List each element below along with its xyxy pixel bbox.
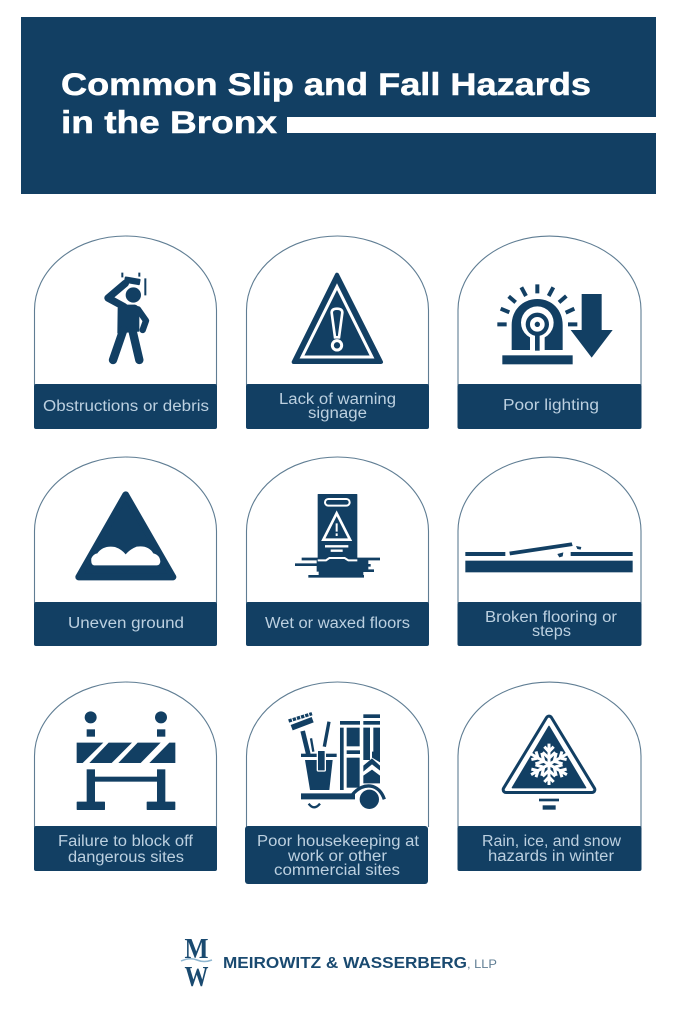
label: warning signage: Lack of warning [279,391,396,408]
title: in the Bronx [61,104,278,140]
title: Common Slip and Fall Hazards [61,66,591,102]
panel: rain, ice and snow hazards [458,682,642,871]
icon: siren with down arrow [497,284,613,364]
icon: wet floor sign in puddle [295,494,380,578]
logo wordmark: MEIROWITZ & WASSERBERG [223,955,467,972]
icon: road barricade [77,711,175,810]
label: uneven ground: Uneven ground [68,615,184,632]
icon: cleaning cart [289,714,384,809]
logo mark: W [184,962,208,993]
icon: warning triangle [294,275,381,362]
label: rain ice snow: Rain, ice, and snow [482,833,622,850]
panel: obstructions or debris [34,236,217,429]
panel: wet or waxed floors [246,457,429,646]
label: poor lighting: Poor lighting [503,397,599,414]
label: poor housekeeping: Poor housekeeping at [257,833,420,850]
panel: uneven ground [34,457,217,646]
panel: broken flooring or steps [458,457,642,646]
panel: poor housekeeping [245,682,428,884]
icon: bump road sign [79,495,173,577]
label: broken flooring: Broken flooring or [485,609,617,626]
label: wet floors: Wet or waxed floors [265,615,410,632]
logo mark: M [184,934,208,965]
label: rain ice snow: hazards in winter [488,848,614,865]
title accent bar [287,117,656,133]
icon: person hit by falling object [108,273,146,360]
label: warning signage: signage [308,405,367,422]
label: obstructions: Obstructions or debris [43,398,209,415]
label: poor housekeeping: work or other [287,848,387,865]
panel: lack of warning signage [246,236,429,429]
header banner [21,17,656,194]
icon: broken floorboards [465,542,633,572]
panel: failure to block off dangerous sites [34,682,217,871]
label: failure to block: Failure to block off [58,833,194,850]
logo suffix: , LLP [467,957,497,971]
logo: Meirowitz & Wasserberg [181,934,497,993]
label: failure to block: dangerous sites [68,849,184,866]
label: poor housekeeping: commercial sites [274,862,400,879]
panel: poor lighting [458,236,642,429]
logo mark [181,934,212,993]
label: broken flooring: steps [532,623,571,640]
icon: snowflake warning sign [506,719,592,810]
